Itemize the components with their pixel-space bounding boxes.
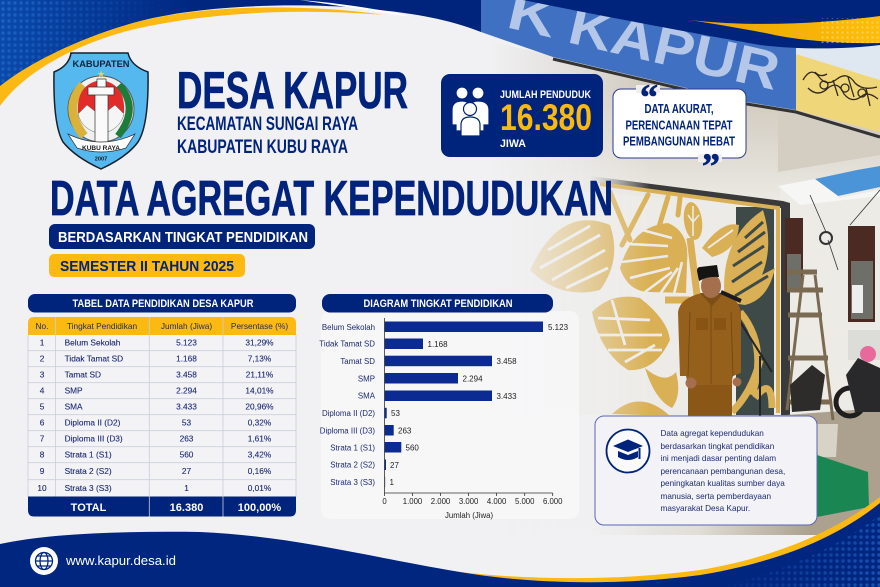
paper notices	[852, 285, 863, 313]
table header: Tingkat Pendidikan	[67, 321, 138, 331]
navy band	[481, 0, 880, 48]
row 8	[40, 450, 272, 460]
name sign	[481, 0, 796, 110]
navy wave	[0, 503, 880, 587]
quote line 3: PEMBANGUNAN HEBAT	[623, 134, 735, 148]
row 3: 3.458	[176, 370, 197, 380]
pockets	[696, 318, 726, 330]
white bucket	[815, 424, 838, 457]
lower roof shadow	[778, 179, 880, 205]
axes	[384, 318, 553, 496]
row 5: 20,96%	[245, 402, 274, 412]
value labels: 1.168	[428, 340, 448, 349]
stem to torso	[665, 296, 690, 304]
small upright leaf	[684, 202, 702, 240]
axis title: Jumlah (Jiwa)	[445, 511, 493, 520]
row 1: 1	[40, 338, 45, 348]
row 7: 263	[180, 434, 194, 444]
white mountains	[78, 105, 124, 134]
callout text: Data agregat kependudukan	[660, 429, 764, 438]
closing quote mark: ”	[702, 146, 720, 186]
row 5: 3.433	[176, 402, 197, 412]
window panes	[787, 254, 873, 319]
leaf sprig	[702, 224, 739, 257]
row 6: 0,32%	[248, 418, 272, 428]
value labels: 560	[406, 444, 419, 452]
side wall	[780, 190, 880, 415]
category labels: Strata 3 (S3)	[330, 478, 375, 487]
axis tick labels	[382, 497, 563, 506]
bird-shaped leaf	[724, 210, 775, 305]
gold swoosh left	[0, 7, 385, 106]
rice wreath	[73, 85, 84, 136]
tower	[88, 79, 114, 143]
row 8: 560	[180, 450, 194, 460]
red field	[78, 80, 124, 120]
shield	[54, 53, 148, 169]
row 3: Tamat SD	[65, 370, 101, 380]
table total row	[28, 496, 296, 516]
wooden ladder	[787, 272, 833, 420]
fascia shadow	[553, 59, 880, 137]
white swoosh accent	[300, 0, 412, 17]
ornament scrollwork	[803, 72, 878, 106]
axis tick labels: 2.000	[431, 497, 451, 506]
icon: graduation cap	[606, 430, 650, 472]
ground	[624, 410, 880, 535]
building wall and soffit	[516, 48, 880, 204]
row 4: SMP	[65, 386, 83, 396]
row 10: 0,01%	[248, 483, 272, 493]
collar shading	[700, 293, 724, 306]
row 10	[37, 483, 272, 493]
row 10: 1	[184, 483, 189, 493]
row 7: Diploma III (D3)	[65, 434, 123, 444]
table total row: 16.380	[170, 502, 203, 514]
monstera leaf lower	[592, 297, 670, 370]
sign letters	[502, 0, 785, 102]
face	[701, 274, 721, 298]
crest label ribbon: KUBU RAYA	[82, 145, 120, 152]
callout text	[660, 429, 785, 513]
screen frame	[590, 176, 790, 415]
value labels: 263	[398, 426, 412, 436]
value labels: 3.433	[496, 392, 517, 401]
table header	[28, 317, 296, 335]
sky	[770, 40, 880, 80]
screen backing	[440, 180, 781, 415]
banner: semester: SEMESTER II TAHUN 2025	[60, 258, 234, 275]
hands	[686, 378, 696, 388]
row 7	[40, 434, 272, 444]
row 3	[40, 370, 274, 380]
category labels: SMA	[358, 392, 376, 401]
bars	[384, 322, 543, 487]
row 7: 1,61%	[248, 434, 272, 444]
star: ★	[97, 69, 105, 79]
chart title: DIAGRAM TINGKAT PENDIDIKAN	[364, 298, 513, 310]
stat panel: population	[441, 74, 603, 157]
black cap	[697, 265, 719, 281]
row 2: 1.168	[176, 354, 197, 364]
icon: family	[452, 87, 489, 136]
motorcycles	[790, 346, 880, 416]
yellow ornament panel	[796, 54, 880, 132]
category labels: Tidak Tamat SD	[319, 340, 375, 349]
legs	[688, 380, 732, 416]
value labels: 3.458	[496, 357, 517, 366]
row 5: SMA	[65, 402, 83, 412]
table title: TABEL DATA PENDIDIKAN DESA KAPUR	[72, 298, 254, 310]
bottom leaf	[645, 368, 678, 408]
stat value: 16.380	[500, 97, 592, 138]
pink helmet	[860, 346, 876, 362]
row 1	[40, 338, 274, 348]
faint far-left monstera	[530, 220, 614, 292]
green box	[817, 455, 869, 517]
blue roof	[815, 166, 880, 196]
table total row: 100,00%	[238, 502, 281, 514]
row 7: 7	[40, 434, 45, 444]
row 9: 27	[182, 466, 191, 476]
gold leaf cutouts	[530, 192, 775, 416]
table body background	[28, 317, 296, 516]
banner: basis	[49, 224, 315, 249]
banner: basis: BERDASARKAN TINGKAT PENDIDIKAN	[58, 229, 308, 246]
row 3: 3	[40, 370, 45, 380]
bottom-left leaf	[612, 401, 670, 416]
dark window behind screen	[736, 207, 774, 415]
panel: bar chart	[319, 294, 579, 520]
banner: semester	[49, 254, 245, 277]
leaf wreath	[118, 85, 129, 136]
stem	[690, 238, 697, 295]
ribbon	[68, 134, 135, 152]
value labels: 2.294	[462, 374, 483, 384]
row 3: 21,11%	[246, 370, 274, 380]
table header: No.	[36, 321, 48, 331]
gold swoosh	[690, 16, 880, 43]
website link: www.kapur.desa.id	[65, 553, 176, 568]
quote line 2: PERENCANAAN TEPAT	[626, 118, 733, 132]
axis tick labels: 6.000	[543, 497, 563, 506]
row 9	[40, 466, 272, 476]
crest year: 2007	[95, 156, 107, 162]
category labels	[319, 323, 376, 487]
table grid	[28, 317, 296, 516]
soffit beam	[778, 104, 880, 172]
microphone stand	[741, 322, 773, 416]
axis tick labels: 1.000	[403, 497, 423, 506]
halftone dots right	[720, 515, 880, 587]
callout: explanation	[595, 416, 817, 525]
stat label: JUMLAH PENDUDUK	[500, 89, 591, 101]
value labels: 53	[391, 409, 400, 418]
axis tick labels: 0	[382, 497, 387, 506]
crest ring	[68, 76, 134, 142]
subtitle: kecamatan: KECAMATAN SUNGAI RAYA	[177, 114, 358, 135]
bottom wave	[0, 497, 880, 587]
axis tick labels: 5.000	[515, 497, 535, 506]
table rows	[37, 338, 274, 493]
value labels: 1	[390, 478, 394, 487]
table total row: TOTAL	[71, 502, 107, 514]
row 5: 5	[40, 402, 45, 412]
callout text: ini menjadi dasar penting dalam	[660, 454, 776, 463]
row 6: 6	[40, 418, 45, 428]
opening quote mark: “	[640, 77, 658, 117]
photo: village office building	[516, 48, 880, 535]
title: Desa Kapur: DESA KAPUR	[177, 62, 408, 120]
top wave: navy with gold swoosh	[0, 0, 481, 106]
row 2: 2	[40, 354, 45, 364]
row 10: 10	[37, 483, 47, 493]
torso	[678, 293, 741, 385]
axis tick labels: 4.000	[487, 497, 507, 506]
lower right gold curl	[732, 312, 772, 412]
monstera leaf upper	[620, 223, 687, 294]
callout text: perencanaan pembangunan desa,	[660, 467, 785, 476]
cable coil	[810, 190, 880, 270]
top-right wave	[481, 0, 880, 48]
row 9: Strata 2 (S2)	[65, 466, 112, 476]
row 1: Belum Sekolah	[65, 338, 121, 348]
row 6: Diploma II (D2)	[65, 418, 121, 428]
value labels: 5.123	[548, 323, 569, 332]
chart background	[321, 311, 579, 519]
callout text: berdasarkan tingkat pendidikan	[660, 442, 775, 451]
row 2: Tidak Tamat SD	[65, 354, 123, 364]
row 6: 53	[182, 418, 191, 428]
crest label top: KABUPATEN	[72, 59, 130, 69]
quote line 1: DATA AKURAT,	[644, 102, 714, 116]
row 9: 0,16%	[248, 466, 272, 476]
gold screen border	[600, 184, 778, 413]
row 8: 3,42%	[248, 450, 272, 460]
gold swoosh	[460, 497, 880, 582]
row 8: 8	[40, 450, 45, 460]
top lattice	[610, 192, 680, 245]
value labels	[390, 323, 569, 487]
category labels: SMP	[358, 374, 375, 383]
arm seams	[688, 300, 733, 384]
row 10: Strata 3 (S3)	[65, 483, 112, 493]
quote box	[613, 77, 746, 186]
category labels: Tamat SD	[340, 357, 375, 366]
category labels: Diploma II (D2)	[322, 409, 375, 418]
row 6	[40, 418, 272, 428]
brown windows	[785, 218, 875, 322]
row 1: 5.123	[176, 338, 197, 348]
official in brown uniform	[678, 265, 742, 416]
callout text: peningkatan kualitas sumber daya	[660, 479, 785, 488]
category labels: Diploma III (D3)	[320, 426, 375, 435]
gold halftone	[820, 18, 880, 43]
row 4: 4	[40, 386, 45, 396]
callout text: masyarakat Desa Kapur.	[660, 504, 750, 513]
category labels: Strata 2 (S2)	[330, 461, 375, 470]
table header: Persentase (%)	[231, 321, 288, 331]
subtitle: kabupaten: KABUPATEN KUBU RAYA	[177, 137, 348, 158]
halftone dots left	[0, 0, 180, 85]
row 4: 2.294	[176, 386, 197, 396]
category labels: Belum Sekolah	[322, 323, 375, 332]
row 8: Strata 1 (S1)	[65, 450, 112, 460]
icon: globe	[30, 547, 58, 575]
value labels: 27	[390, 461, 399, 470]
white plinth	[848, 330, 880, 360]
chart title	[322, 294, 553, 312]
row 4: 14,01%	[245, 386, 274, 396]
stat unit: JIWA	[500, 138, 526, 150]
table title	[28, 294, 296, 312]
table header: Jumlah (Jiwa)	[161, 321, 212, 331]
category labels: Strata 1 (S1)	[330, 443, 375, 452]
row 9: 9	[40, 466, 45, 476]
axis tick labels: 3.000	[459, 497, 479, 506]
row 5	[40, 402, 274, 412]
left navy band	[0, 0, 481, 88]
row 1: 31,29%	[245, 338, 274, 348]
row 2	[40, 354, 272, 364]
callout text: manusia, serta pemberdayaan	[660, 492, 772, 501]
logo: Kabupaten Kubu Raya crest	[54, 53, 148, 169]
row 4	[40, 386, 274, 396]
row 2: 7,13%	[248, 354, 272, 364]
main heading: DATA AGREGAT KEPENDUDUKAN	[50, 172, 613, 226]
panel: education table	[28, 294, 296, 516]
microphone	[721, 292, 741, 301]
